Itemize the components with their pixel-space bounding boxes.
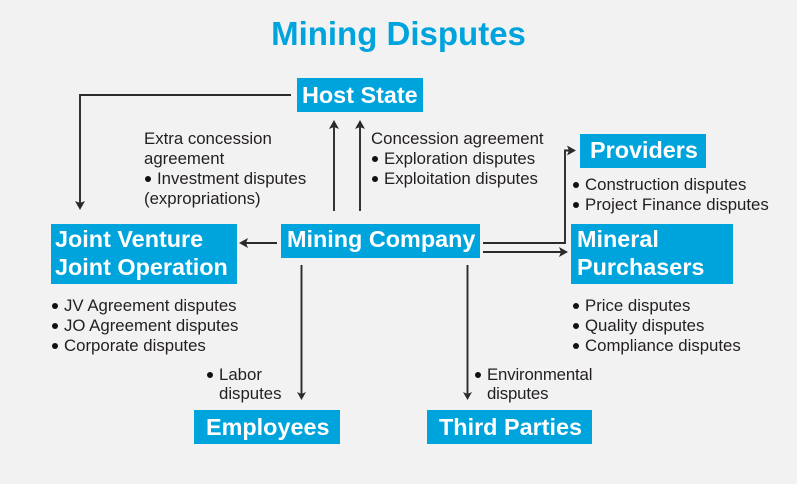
text: extra concession agreement: (expropriations)	[144, 189, 261, 208]
arrow: Mining Company to Host State, extra concession	[329, 120, 339, 211]
box: Joint Venture / Joint Operation: Joint Venture	[55, 226, 203, 252]
text: extra concession agreement: Investment disputes	[157, 169, 306, 188]
text: concession agreement: Concession agreement	[371, 129, 544, 148]
title: Mining Disputes	[271, 15, 526, 52]
box: Host State: Host State	[302, 82, 418, 108]
text: environmental disputes: disputes	[487, 384, 548, 403]
text: concession agreement: Exploration disputes	[384, 149, 535, 168]
box: Joint Venture / Joint Operation	[51, 224, 237, 284]
text: mineral purchaser disputes: Quality disputes	[585, 316, 704, 335]
arrow: Host State to Joint Venture	[75, 95, 291, 210]
text: mineral purchaser disputes	[573, 296, 741, 355]
box: Joint Venture / Joint Operation: Joint Operation	[55, 254, 228, 280]
text: labor disputes: Labor	[219, 365, 262, 384]
arrow: Mining Company to Providers	[483, 146, 576, 243]
text: joint venture disputes: JV Agreement disputes	[64, 296, 237, 315]
text: joint venture disputes: Corporate disputes	[64, 336, 206, 355]
text: labor disputes	[207, 365, 282, 403]
text: joint venture disputes: JO Agreement disputes	[64, 316, 238, 335]
arrow: Mining Company to Third Parties	[463, 265, 472, 400]
arrow: Mining Company to Employees	[297, 265, 306, 400]
box: Mining Company: Mining Company	[287, 226, 475, 252]
box: Providers	[580, 134, 706, 168]
box: Mineral Purchasers: Purchasers	[577, 254, 704, 280]
text: mineral purchaser disputes: Price disputes	[585, 296, 690, 315]
text: extra concession agreement: agreement	[144, 149, 224, 168]
box: Third Parties	[427, 410, 592, 444]
box: Third Parties: Third Parties	[439, 414, 582, 440]
box: Mineral Purchasers: Mineral	[577, 226, 659, 252]
box: Providers: Providers	[590, 137, 698, 163]
text: extra concession agreement	[144, 129, 306, 208]
text: mineral purchaser disputes: Compliance disputes	[585, 336, 741, 355]
text: joint venture disputes	[52, 296, 238, 355]
arrow: Mining Company to Joint Venture	[239, 238, 277, 248]
text: extra concession agreement: Extra concession	[144, 129, 272, 148]
text: labor disputes: disputes	[219, 384, 282, 403]
text: concession agreement	[371, 129, 544, 188]
text: concession agreement: Exploitation disputes	[384, 169, 538, 188]
arrow: Mining Company to Mineral Purchasers	[483, 247, 568, 257]
text: environmental disputes: Environmental	[487, 365, 592, 384]
arrow: Mining Company to Host State, concession	[355, 120, 365, 211]
text: providers disputes	[573, 175, 769, 214]
text: providers disputes: Project Finance disputes	[585, 195, 769, 214]
box: Mineral Purchasers	[571, 224, 733, 284]
box: Employees: Employees	[206, 414, 330, 440]
box: Employees	[194, 410, 340, 444]
text: providers disputes: Construction disputes	[585, 175, 746, 194]
text: environmental disputes	[475, 365, 592, 403]
